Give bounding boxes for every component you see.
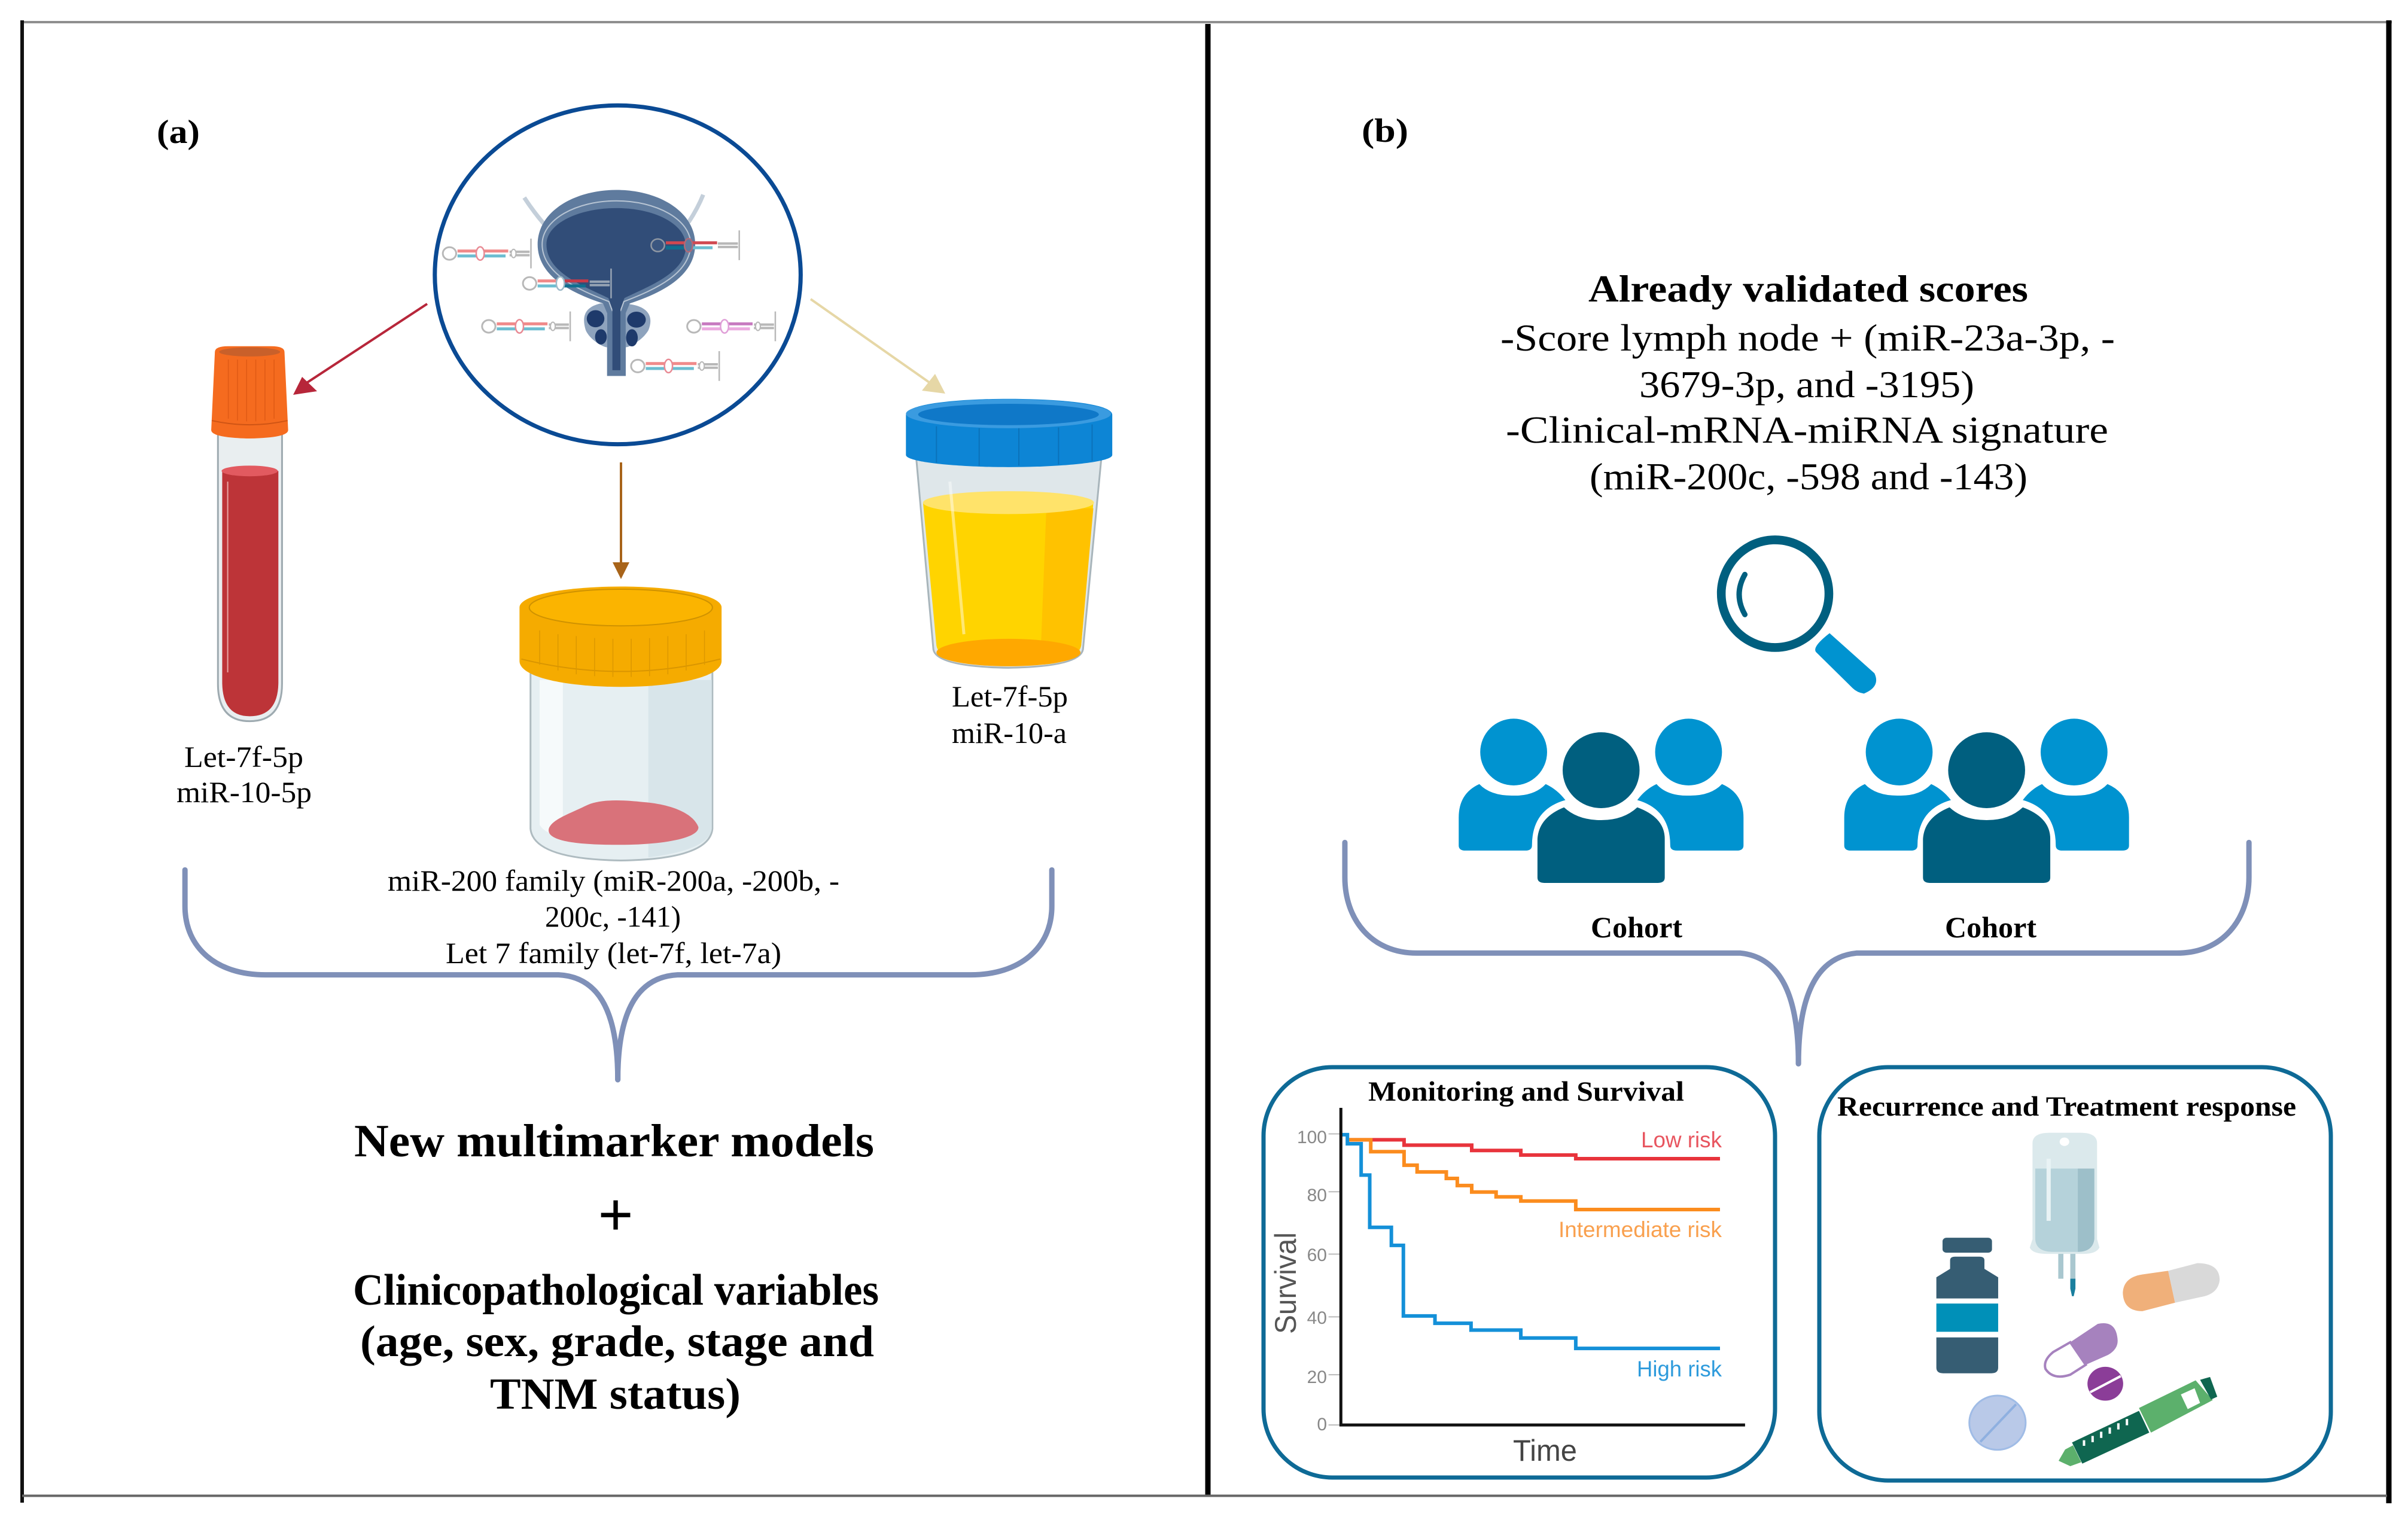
text block: already validated scores: (miR-200c, -598 and -143) <box>1590 455 2028 498</box>
text block: already validated scores: Already validated scores <box>1588 267 2028 310</box>
label: tissue miRNAs: miR-200 family (miR-200a, -200b, - <box>388 864 839 897</box>
label: tissue miRNAs: 200c, -141) <box>545 900 681 933</box>
chart: survival curves: 80 <box>1307 1186 1327 1205</box>
brace: samples merging into models <box>185 870 1052 1080</box>
label: blood miRNAs: Let-7f-5p <box>184 740 303 773</box>
icon: blue tablet <box>1969 1396 2026 1450</box>
label: urine miRNAs <box>952 680 1068 750</box>
heading: new multimarker models: New multimarker models <box>354 1115 874 1166</box>
panel (b): validated scores <box>1264 112 2331 1481</box>
icon: purple capsule and pill <box>2045 1323 2123 1401</box>
chart: survival curves: Intermediate risk <box>1558 1217 1722 1242</box>
icon: blood tube <box>211 346 288 721</box>
heading: clinicopathological variables <box>353 1266 879 1419</box>
chart: survival curves <box>1269 1108 1745 1467</box>
brace: cohorts merging into outcomes <box>1345 842 2249 1064</box>
arrow: to blood tube <box>293 304 427 395</box>
panel heading: Monitoring and Survival <box>1368 1076 1684 1107</box>
chart: survival curves: Time <box>1513 1434 1577 1467</box>
illustration: bladder and prostate circle with miRNA hairpins <box>435 105 800 444</box>
icon: magnifying glass <box>1717 535 1876 693</box>
icon: tissue jar <box>519 587 722 860</box>
icon: medicine vial <box>1937 1238 1998 1373</box>
arrow: to tissue jar <box>613 462 629 579</box>
text block: already validated scores: -Clinical-mRNA-miRNA signature <box>1506 409 2108 451</box>
icon: injector pen <box>2059 1377 2217 1466</box>
arrow: to urine jar <box>811 299 945 394</box>
label: urine miRNAs: miR-10-a <box>952 716 1067 750</box>
chart: survival curves: 60 <box>1307 1245 1327 1265</box>
icon: orange capsule <box>2123 1263 2220 1311</box>
text block: already validated scores: 3679-3p, and -3195) <box>1639 363 1974 406</box>
icon: IV bag <box>2030 1133 2099 1296</box>
label: blood miRNAs: miR-10-5p <box>176 775 312 809</box>
chart: survival curves: 20 <box>1307 1367 1327 1387</box>
icon: cohort group right <box>1844 718 2129 883</box>
text block: already validated scores <box>1500 267 2115 498</box>
chart: survival curves: 100 <box>1297 1128 1327 1147</box>
chart: survival curves: Low risk <box>1641 1128 1722 1152</box>
label: tissue miRNAs: Let 7 family (let-7f, let-7a) <box>446 936 781 970</box>
label: urine miRNAs: Let-7f-5p <box>952 680 1068 713</box>
panel label b: (b) <box>1362 112 1408 150</box>
label: cohort left: Cohort <box>1591 910 1682 944</box>
panel (a): multimarker models <box>157 105 1112 1419</box>
chart: survival curves: Survival <box>1269 1232 1302 1334</box>
plus sign: + <box>598 1180 634 1250</box>
heading: clinicopathological variables: Clinicopathological variables <box>353 1266 879 1315</box>
panel: recurrence and treatment response <box>1819 1067 2331 1481</box>
heading: clinicopathological variables: (age, sex, grade, stage and <box>360 1317 874 1366</box>
icon: urine jar <box>906 399 1112 668</box>
label: tissue miRNAs <box>388 864 839 970</box>
chart: survival curves: High risk <box>1637 1357 1722 1381</box>
panel heading: Recurrence and Treatment response <box>1837 1091 2296 1122</box>
heading: clinicopathological variables: TNM status) <box>490 1370 741 1419</box>
text block: already validated scores: -Score lymph node + (miR-23a-3p, - <box>1500 316 2115 359</box>
hairpin row: five standard hairpins <box>443 239 531 269</box>
label: blood miRNAs <box>176 740 312 809</box>
chart: survival curves: 40 <box>1307 1308 1327 1328</box>
panel label a: (a) <box>157 114 200 151</box>
panel: monitoring and survival <box>1264 1067 1775 1478</box>
chart: survival curves: 0 <box>1317 1415 1327 1434</box>
label: cohort right: Cohort <box>1945 910 2036 944</box>
icon: cohort group left <box>1459 718 1743 883</box>
